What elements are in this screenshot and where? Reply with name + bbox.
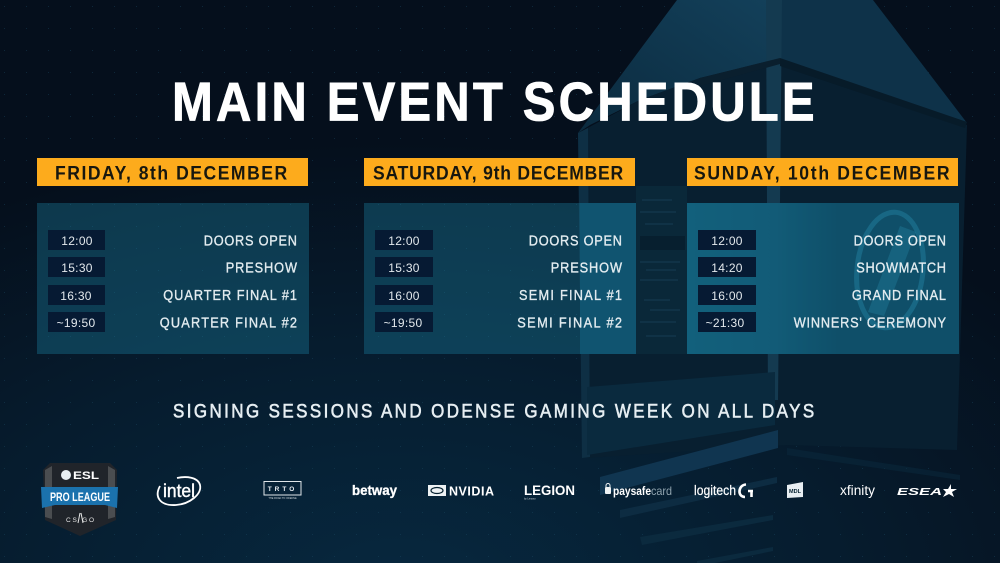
saturday header bar: SATURDAY, 9th DECEMBER xyxy=(373,162,624,184)
signing sessions note: SIGNING SESSIONS AND ODENSE GAMING WEEK ON ALL DAYS xyxy=(173,399,814,422)
sunday schedule card: ~21:30 xyxy=(706,316,744,330)
logo: paysafecard: paysafe xyxy=(613,484,651,498)
friday header bar: FRIDAY, 8th DECEMBER xyxy=(55,162,288,184)
panel: friday xyxy=(37,158,309,354)
saturday schedule card: 15:30 xyxy=(388,261,420,275)
sunday header bar: SUNDAY, 10th DECEMBER xyxy=(694,162,950,184)
logo: xfinity: xfinity xyxy=(840,483,875,498)
friday schedule card: PRESHOW xyxy=(226,260,297,276)
logo: NVIDIA xyxy=(428,484,494,498)
saturday schedule card: SEMI FINAL #1 xyxy=(519,287,622,303)
logo: intel: intel xyxy=(163,481,195,501)
logo: logitech: logitech xyxy=(694,483,736,498)
logo: ESL Pro League: PRO LEAGUE xyxy=(50,492,110,504)
sunday schedule card: 16:00 xyxy=(711,289,743,303)
saturday schedule card: DOORS OPEN xyxy=(529,233,622,249)
friday schedule card: ~19:50 xyxy=(57,316,95,330)
logo: MDL: MDL xyxy=(789,489,802,495)
logo: paysafecard: card xyxy=(651,484,672,498)
logo: Legion: by Lenovo xyxy=(524,498,536,500)
logo: Legion: LEGION xyxy=(524,482,575,498)
logo: TRTO: TRTO xyxy=(268,486,297,493)
saturday schedule card: ~19:50 xyxy=(384,316,422,330)
sunday schedule card: WINNERS' CEREMONY xyxy=(794,315,946,331)
logo: ESL Pro League: CS GO xyxy=(66,517,94,524)
background trophy silhouette xyxy=(578,0,967,563)
logo: betway: betway xyxy=(352,483,397,498)
friday schedule card: 16:30 xyxy=(60,289,92,303)
friday schedule card: DOORS OPEN xyxy=(204,233,297,249)
saturday schedule card xyxy=(364,203,636,354)
logo: ESEA: ESEA xyxy=(897,487,942,498)
logo: intel xyxy=(158,477,200,505)
sunday schedule card xyxy=(687,203,959,354)
logo: ESL Pro League xyxy=(41,463,118,536)
logo: TRTO: THE ROAD TO ODENSE xyxy=(268,497,297,500)
title: MAIN EVENT SCHEDULE xyxy=(172,71,815,132)
logo: ESEA xyxy=(897,484,957,498)
logo: MDL xyxy=(787,482,803,498)
saturday schedule card: 16:00 xyxy=(388,289,420,303)
saturday schedule card: SEMI FINAL #2 xyxy=(517,315,622,331)
friday schedule card xyxy=(37,203,309,354)
logo: TRTO xyxy=(264,482,301,500)
logo: ESL Pro League: ESL xyxy=(73,470,99,482)
sunday schedule card: 14:20 xyxy=(711,261,743,275)
panel: saturday xyxy=(364,158,636,354)
sunday schedule card: SHOWMATCH xyxy=(856,260,946,276)
saturday schedule card: 12:00 xyxy=(388,234,420,248)
saturday schedule card: PRESHOW xyxy=(551,260,622,276)
sunday schedule card: DOORS OPEN xyxy=(854,233,946,249)
logo: NVIDIA: NVIDIA xyxy=(449,484,494,498)
sunday schedule card: 12:00 xyxy=(711,234,743,248)
sunday schedule card: GRAND FINAL xyxy=(852,287,946,303)
panel: sunday xyxy=(687,158,959,354)
friday schedule card: QUARTER FINAL #2 xyxy=(160,315,297,331)
logo: paysafecard xyxy=(605,484,672,498)
friday header bar xyxy=(37,158,308,186)
friday schedule card: 12:00 xyxy=(61,234,93,248)
friday schedule card: 15:30 xyxy=(61,261,93,275)
friday schedule card: QUARTER FINAL #1 xyxy=(163,287,297,303)
